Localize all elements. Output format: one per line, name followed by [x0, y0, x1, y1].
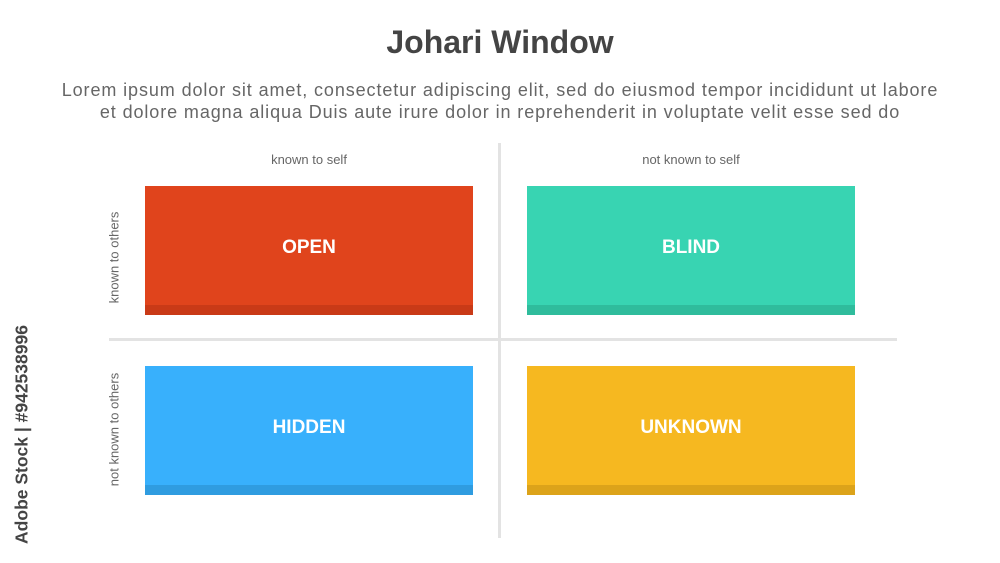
column label: not known to self: not known to self	[642, 152, 740, 167]
panel: unknown: UNKNOWN	[640, 416, 742, 438]
panel: hidden: HIDDEN	[273, 416, 345, 438]
column label: known to self: known to self	[271, 152, 347, 167]
panel: unknown	[527, 366, 855, 495]
watermark id: Adobe Stock | #942538996	[12, 325, 32, 544]
subtitle text	[62, 80, 938, 122]
subtitle text: Lorem ipsum dolor sit amet, consectetur adipiscing elit, sed do eiusmod tempor incididunt ut labore	[62, 80, 938, 100]
row label: not known to others: not known to others	[106, 373, 122, 486]
panel: blind: BLIND	[662, 236, 720, 258]
vertical divider	[498, 143, 501, 538]
title: Johari Window	[386, 24, 614, 60]
panel: open	[145, 186, 473, 315]
panel: blind	[527, 186, 855, 315]
panel: hidden	[145, 366, 473, 495]
subtitle text: et dolore magna aliqua Duis aute irure dolor in reprehenderit in voluptate velit esse sed do	[100, 102, 900, 122]
row label: known to others: known to others	[106, 212, 122, 303]
panel: open: OPEN	[282, 236, 336, 258]
horizontal divider	[109, 338, 897, 341]
